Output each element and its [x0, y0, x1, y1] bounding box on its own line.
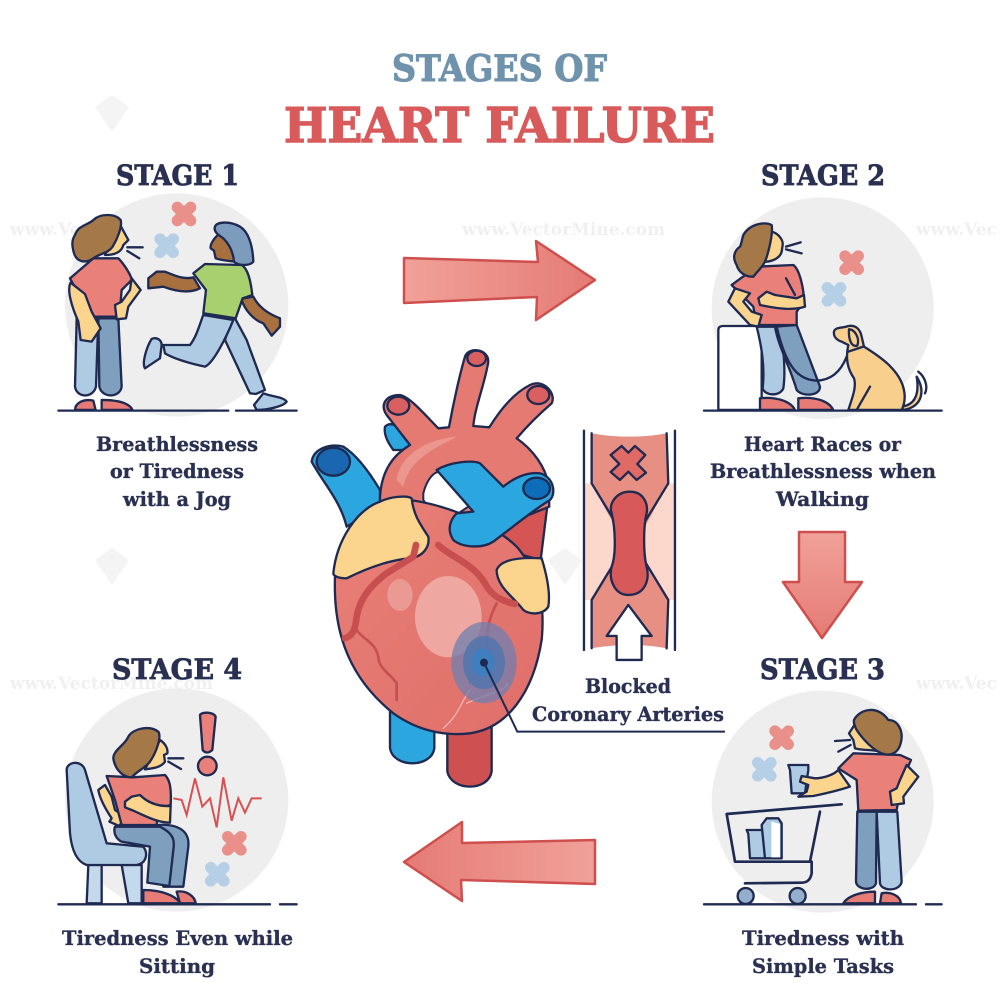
heart body	[335, 500, 543, 734]
watermarks: www.VectorMine.com	[9, 220, 213, 240]
white box	[718, 326, 762, 410]
leash	[777, 327, 847, 381]
caption: stage 3	[742, 926, 904, 978]
arrow: stage 1 to 2	[404, 241, 595, 320]
arrow: stage 2 to 3	[783, 532, 862, 638]
label: blocked coronary arteries	[532, 674, 724, 726]
icon: red cross	[228, 837, 241, 850]
caption: stage 2: Breathlessness when	[710, 459, 936, 483]
aorta with branches	[380, 350, 553, 527]
watermarks: www.VectorMine.com	[9, 674, 213, 694]
right atrium	[497, 558, 549, 613]
heading: stage 4: STAGE 4	[112, 653, 242, 686]
caption: stage 3: Tiredness with	[742, 926, 904, 950]
aorta openings	[387, 351, 549, 415]
lower vessels	[390, 700, 492, 787]
heading: stage 1: STAGE 1	[116, 159, 239, 192]
upper left vein	[312, 424, 410, 527]
icon: blue cross	[211, 868, 224, 881]
icon: blue cross	[758, 763, 771, 776]
icon: red cross	[845, 256, 858, 269]
label: blocked coronary arteries: Coronary Arteries	[532, 702, 724, 726]
caption: stage 2	[710, 432, 936, 511]
watermarks	[9, 95, 997, 694]
label: blocked coronary arteries: Blocked	[585, 674, 671, 698]
vessel wall	[592, 433, 668, 648]
right dark chamber	[497, 490, 549, 560]
watermarks: www.VectorMine.com	[461, 220, 665, 240]
caption: stage 3: Simple Tasks	[752, 954, 894, 978]
caption: stage 1: or Tiredness	[110, 459, 244, 483]
blockage site	[451, 622, 517, 703]
left atrium	[333, 497, 429, 578]
watermarks: www.Vec	[915, 220, 997, 240]
heading: stage 2: STAGE 2	[761, 159, 885, 192]
heading: stage 3: STAGE 3	[760, 653, 885, 686]
icon: cross mark	[611, 446, 646, 480]
caption: stage 4: Sitting	[139, 954, 215, 978]
seated person	[98, 728, 196, 903]
watermarks: www.Vec	[915, 674, 997, 694]
icon: exclamation mark	[198, 713, 217, 775]
caption: stage 1	[96, 432, 258, 511]
chair	[67, 763, 146, 903]
dog	[834, 326, 926, 410]
person with chest pain	[728, 223, 833, 410]
heart diagram	[312, 350, 725, 787]
caption: stage 4	[62, 926, 293, 978]
ground line	[704, 407, 942, 414]
arrow: stage 3 to 4	[404, 822, 595, 901]
title	[284, 48, 715, 154]
title: STAGES OF	[392, 48, 607, 90]
icon: red cross	[775, 731, 788, 744]
artery blockage inset	[584, 431, 675, 660]
ECG line	[173, 777, 262, 827]
panel: stage 1 illustration	[58, 193, 297, 417]
caption: stage 2: Heart Races or	[744, 432, 901, 456]
arrow: to blockage	[607, 605, 652, 660]
panel: stage 2 illustration	[704, 197, 942, 419]
icon: blue cross	[160, 239, 173, 252]
ground line	[58, 407, 297, 414]
pulmonary artery	[437, 462, 553, 546]
panel: stage 4 illustration	[58, 688, 297, 912]
shopping cart	[727, 804, 842, 904]
leader line	[484, 663, 725, 732]
ground line	[704, 901, 942, 908]
coronary arteries	[345, 545, 515, 728]
outer wall	[584, 483, 675, 600]
standing person	[69, 215, 143, 410]
aorta highlight	[397, 437, 457, 487]
arch opening	[423, 472, 473, 517]
caption: stage 2: Walking	[775, 487, 869, 511]
ground line	[58, 901, 297, 908]
clot	[611, 492, 648, 595]
icon: red cross	[177, 207, 191, 221]
icon: blue cross	[827, 288, 841, 301]
shopping person	[788, 710, 918, 903]
caption: stage 1: with a Jog	[122, 487, 231, 511]
caption: stage 1: Breathlessness	[96, 432, 258, 456]
heart highlights	[387, 576, 482, 657]
caption: stage 4: Tiredness Even while	[62, 926, 293, 950]
running person	[144, 223, 287, 410]
title: HEART FAILURE	[284, 98, 715, 154]
panel: stage 3 illustration	[704, 691, 942, 913]
